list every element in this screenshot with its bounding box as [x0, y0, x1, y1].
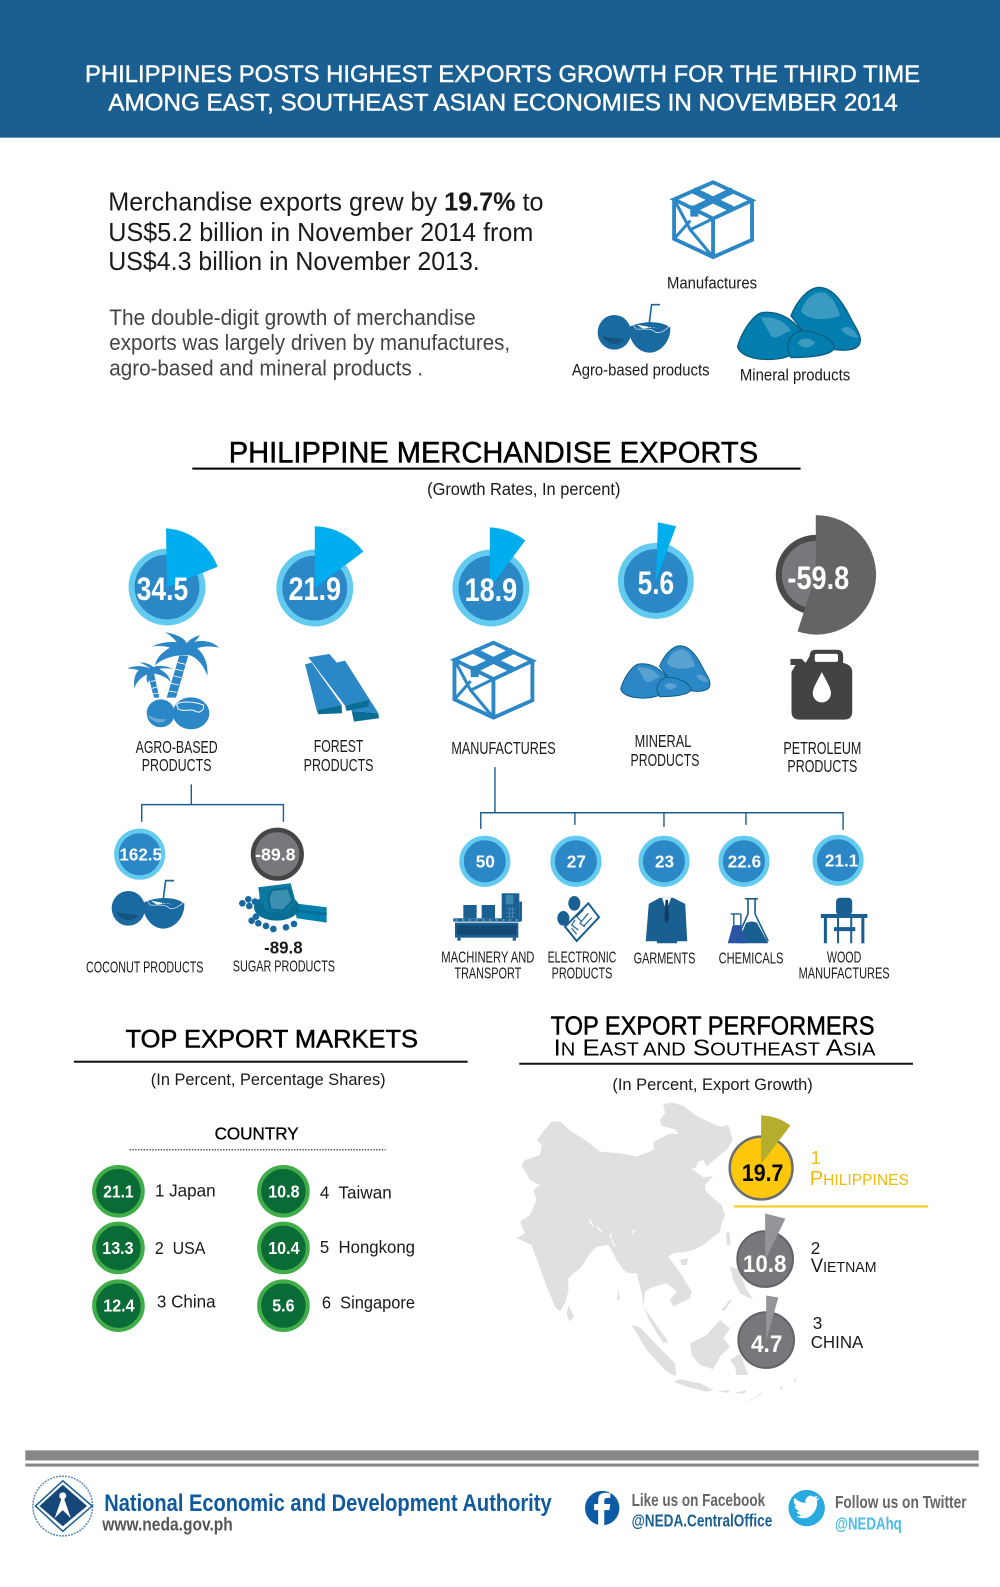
market: usa: 2 USA: [155, 1238, 206, 1258]
facebook text: @NEDA.CentralOffice: [632, 1510, 772, 1530]
label: mineral products: Mineral products: [740, 366, 850, 385]
intro statement: US$4.3 billion in November 2013.: [108, 246, 480, 276]
icon: forest planks: [305, 654, 379, 722]
badge: garments 23: 23: [655, 851, 674, 871]
chart: forest 21.9: 21.9: [288, 571, 341, 607]
label: chemicals: CHEMICALS: [719, 951, 783, 968]
chart: mineral 5.6: 5.6: [638, 565, 674, 601]
label: manufactures: MANUFACTURES: [451, 738, 556, 758]
label: machinery and transport: [441, 950, 534, 983]
label: philippines: [810, 1148, 909, 1190]
label: agro-based products: PRODUCTS: [142, 755, 212, 775]
market: taiwan: 10.8: [268, 1181, 300, 1201]
label: wood manufactures: WOOD: [827, 950, 861, 967]
badge: electronic 27: 27: [567, 851, 586, 871]
badge: chemicals 22.6: 22.6: [728, 851, 761, 871]
performer: china 4.7: 4.7: [751, 1331, 782, 1358]
connector: agro-based breakdown: [142, 784, 283, 822]
label: mineral products: [631, 731, 699, 770]
heading: philippine merchandise exports: PHILIPPINE MERCHANDISE EXPORTS: [229, 437, 758, 470]
market: china: [94, 1281, 216, 1330]
badge: coconut products 162.5: 162.5: [119, 844, 162, 864]
facebook text: [632, 1490, 772, 1530]
label: electronic products: [548, 950, 616, 983]
chart: manufactures 18.9: 18.9: [465, 572, 517, 608]
label: petroleum products: [783, 738, 861, 776]
badge: electronic 27: [553, 838, 599, 885]
website: www.neda.gov.ph: [101, 1514, 233, 1534]
badge: wood 21.1: 21.1: [825, 850, 858, 870]
label: electronic products: PRODUCTS: [552, 966, 612, 983]
title: [85, 61, 920, 116]
label: electronic products: ELECTRONIC: [548, 950, 616, 967]
subheading: growth rates: (Growth Rates, In percent): [427, 479, 620, 499]
label: mineral products: PRODUCTS: [631, 750, 699, 770]
connector: manufactures breakdown: [481, 767, 843, 830]
twitter text: [835, 1492, 967, 1533]
intro paragraph: [109, 305, 510, 380]
label: garments: GARMENTS: [634, 951, 695, 968]
badge: sugar products -89.8: -89.8: [255, 844, 296, 864]
icon: manufactures box: [454, 643, 532, 718]
icon: twitter: [788, 1490, 825, 1526]
market: japan: [94, 1167, 216, 1216]
label: machinery and transport: TRANSPORT: [454, 966, 522, 983]
label: machinery and transport: MACHINERY AND: [441, 950, 534, 967]
market: singapore: [259, 1281, 415, 1330]
label: philippines: 1: [811, 1148, 821, 1168]
badge: machinery 50: [462, 838, 508, 885]
icon: suit: [646, 898, 687, 943]
heading: top export performers: IN EAST AND SOUTHEAST ASIA: [554, 1035, 876, 1061]
label: petroleum products: PETROLEUM: [783, 738, 861, 758]
market: singapore: 6 Singapore: [322, 1293, 415, 1313]
chart: agro-based 34.5: [132, 528, 218, 622]
label: agro-based products: AGRO-BASED: [136, 737, 218, 757]
twitter text: Follow us on Twitter: [835, 1492, 967, 1512]
intro paragraph: The double-digit growth of merchandise: [109, 305, 476, 330]
map: east and southeast asia: [517, 1103, 797, 1403]
label: forest products: [304, 736, 373, 775]
twitter text: @NEDAhq: [835, 1513, 902, 1533]
performer: vietnam 10.8: 10.8: [743, 1251, 786, 1278]
market: usa: 13.3: [102, 1238, 134, 1258]
footer rules: [25, 1450, 979, 1467]
label: coconut products: COCONUT PRODUCTS: [86, 960, 203, 977]
badge: garments 23: [641, 838, 687, 885]
label: agro-based products: Agro-based products: [572, 360, 710, 379]
header banner: [0, 0, 1000, 138]
label: agro-based products: [136, 737, 218, 775]
market: taiwan: [259, 1167, 392, 1216]
logo: NEDA seal: [33, 1476, 93, 1536]
intro statement: [108, 187, 544, 276]
performer: vietnam 10.8: [737, 1214, 793, 1287]
table header: country: COUNTRY: [215, 1124, 299, 1144]
icon: minerals: [621, 646, 710, 698]
market: hongkong: 5 Hongkong: [320, 1237, 415, 1257]
chart: petroleum -59.8: -59.8: [787, 560, 849, 596]
label: china: CHINA: [811, 1332, 864, 1352]
chart: manufactures 18.9: [455, 527, 526, 623]
title: AMONG EAST, SOUTHEAST ASIAN ECONOMIES IN NOVEMBER 2014: [108, 89, 898, 116]
market: taiwan: 4 Taiwan: [320, 1182, 392, 1202]
performer: philippines 19.7: [730, 1115, 793, 1199]
icon: petroleum can: [790, 650, 852, 720]
icon: sugar scoop: [239, 883, 327, 932]
icon: wood desk and chair: [821, 898, 867, 943]
icon: palm trees with coconuts: [127, 632, 219, 729]
organisation name: National Economic and Development Authority: [104, 1490, 552, 1517]
chart: petroleum -59.8: [779, 515, 876, 635]
label: china: 3: [813, 1313, 822, 1333]
chart: agro-based 34.5: 34.5: [137, 571, 188, 607]
market: hongkong: [259, 1224, 415, 1272]
label: petroleum products: PRODUCTS: [787, 756, 857, 776]
market: hongkong: 10.4: [268, 1238, 300, 1258]
market: japan: 1 Japan: [155, 1180, 216, 1200]
icon: facebook: [585, 1491, 619, 1525]
badge: sugar products -89.8: [253, 830, 302, 879]
badge: chemicals 22.6: [721, 838, 767, 885]
icon: coconut: [112, 881, 184, 929]
intro statement: Merchandise exports grew by 19.7% to: [108, 187, 544, 217]
intro paragraph: agro-based and mineral products .: [109, 355, 423, 380]
label: philippines: PHILIPPINES: [810, 1168, 909, 1190]
label: china: [811, 1313, 864, 1352]
performer: china 4.7: [738, 1296, 794, 1368]
market: china: 12.4: [103, 1296, 135, 1316]
chart: mineral 5.6: [621, 522, 691, 616]
icon: electronics: [557, 896, 599, 941]
facebook text: Like us on Facebook: [632, 1490, 766, 1510]
label: vietnam: VIETNAM: [811, 1256, 877, 1277]
badge: wood 21.1: [815, 837, 861, 884]
label: wood manufactures: MANUFACTURES: [799, 966, 890, 983]
market: china: 3 China: [157, 1292, 216, 1312]
subheading: export growth: (In Percent, Export Growth): [612, 1075, 813, 1094]
label: sugar products: SUGAR PRODUCTS: [233, 959, 335, 976]
intro statement: US$5.2 billion in November 2014 from: [108, 217, 533, 247]
label: forest products: FOREST: [314, 736, 364, 756]
title: PHILIPPINES POSTS HIGHEST EXPORTS GROWTH FOR THE THIRD TIME: [85, 61, 920, 88]
icon: chemicals: [728, 899, 768, 943]
intro paragraph: exports was largely driven by manufactures,: [109, 330, 510, 355]
badge: machinery 50: 50: [476, 851, 495, 871]
heading: top export performers: [519, 1010, 913, 1065]
chart: forest 21.9: [279, 526, 363, 623]
label: manufactures: Manufactures: [667, 273, 757, 292]
label: vietnam: 2: [811, 1238, 820, 1258]
market: usa: [94, 1224, 206, 1272]
icon: manufactures box: [674, 182, 752, 257]
badge: coconut products 162.5: [116, 831, 163, 878]
label: mineral products: MINERAL: [635, 731, 691, 751]
icon: coconut: [598, 305, 670, 353]
icon: minerals: [737, 287, 860, 359]
performer: philippines 19.7: 19.7: [742, 1160, 783, 1187]
heading: top export performers: TOP EXPORT PERFORMERS: [551, 1010, 874, 1040]
label: forest products: PRODUCTS: [304, 755, 373, 775]
icon: machinery: [453, 893, 522, 941]
market: japan: 21.1: [103, 1181, 134, 1201]
label: vietnam: [811, 1238, 877, 1277]
market: singapore: 5.6: [272, 1296, 295, 1316]
value: sugar -89.8: -89.8: [264, 937, 303, 957]
subheading: percentage shares: (In Percent, Percentage Shares): [151, 1070, 386, 1089]
heading: top export markets: TOP EXPORT MARKETS: [126, 1026, 418, 1054]
label: wood manufactures: [799, 950, 890, 983]
